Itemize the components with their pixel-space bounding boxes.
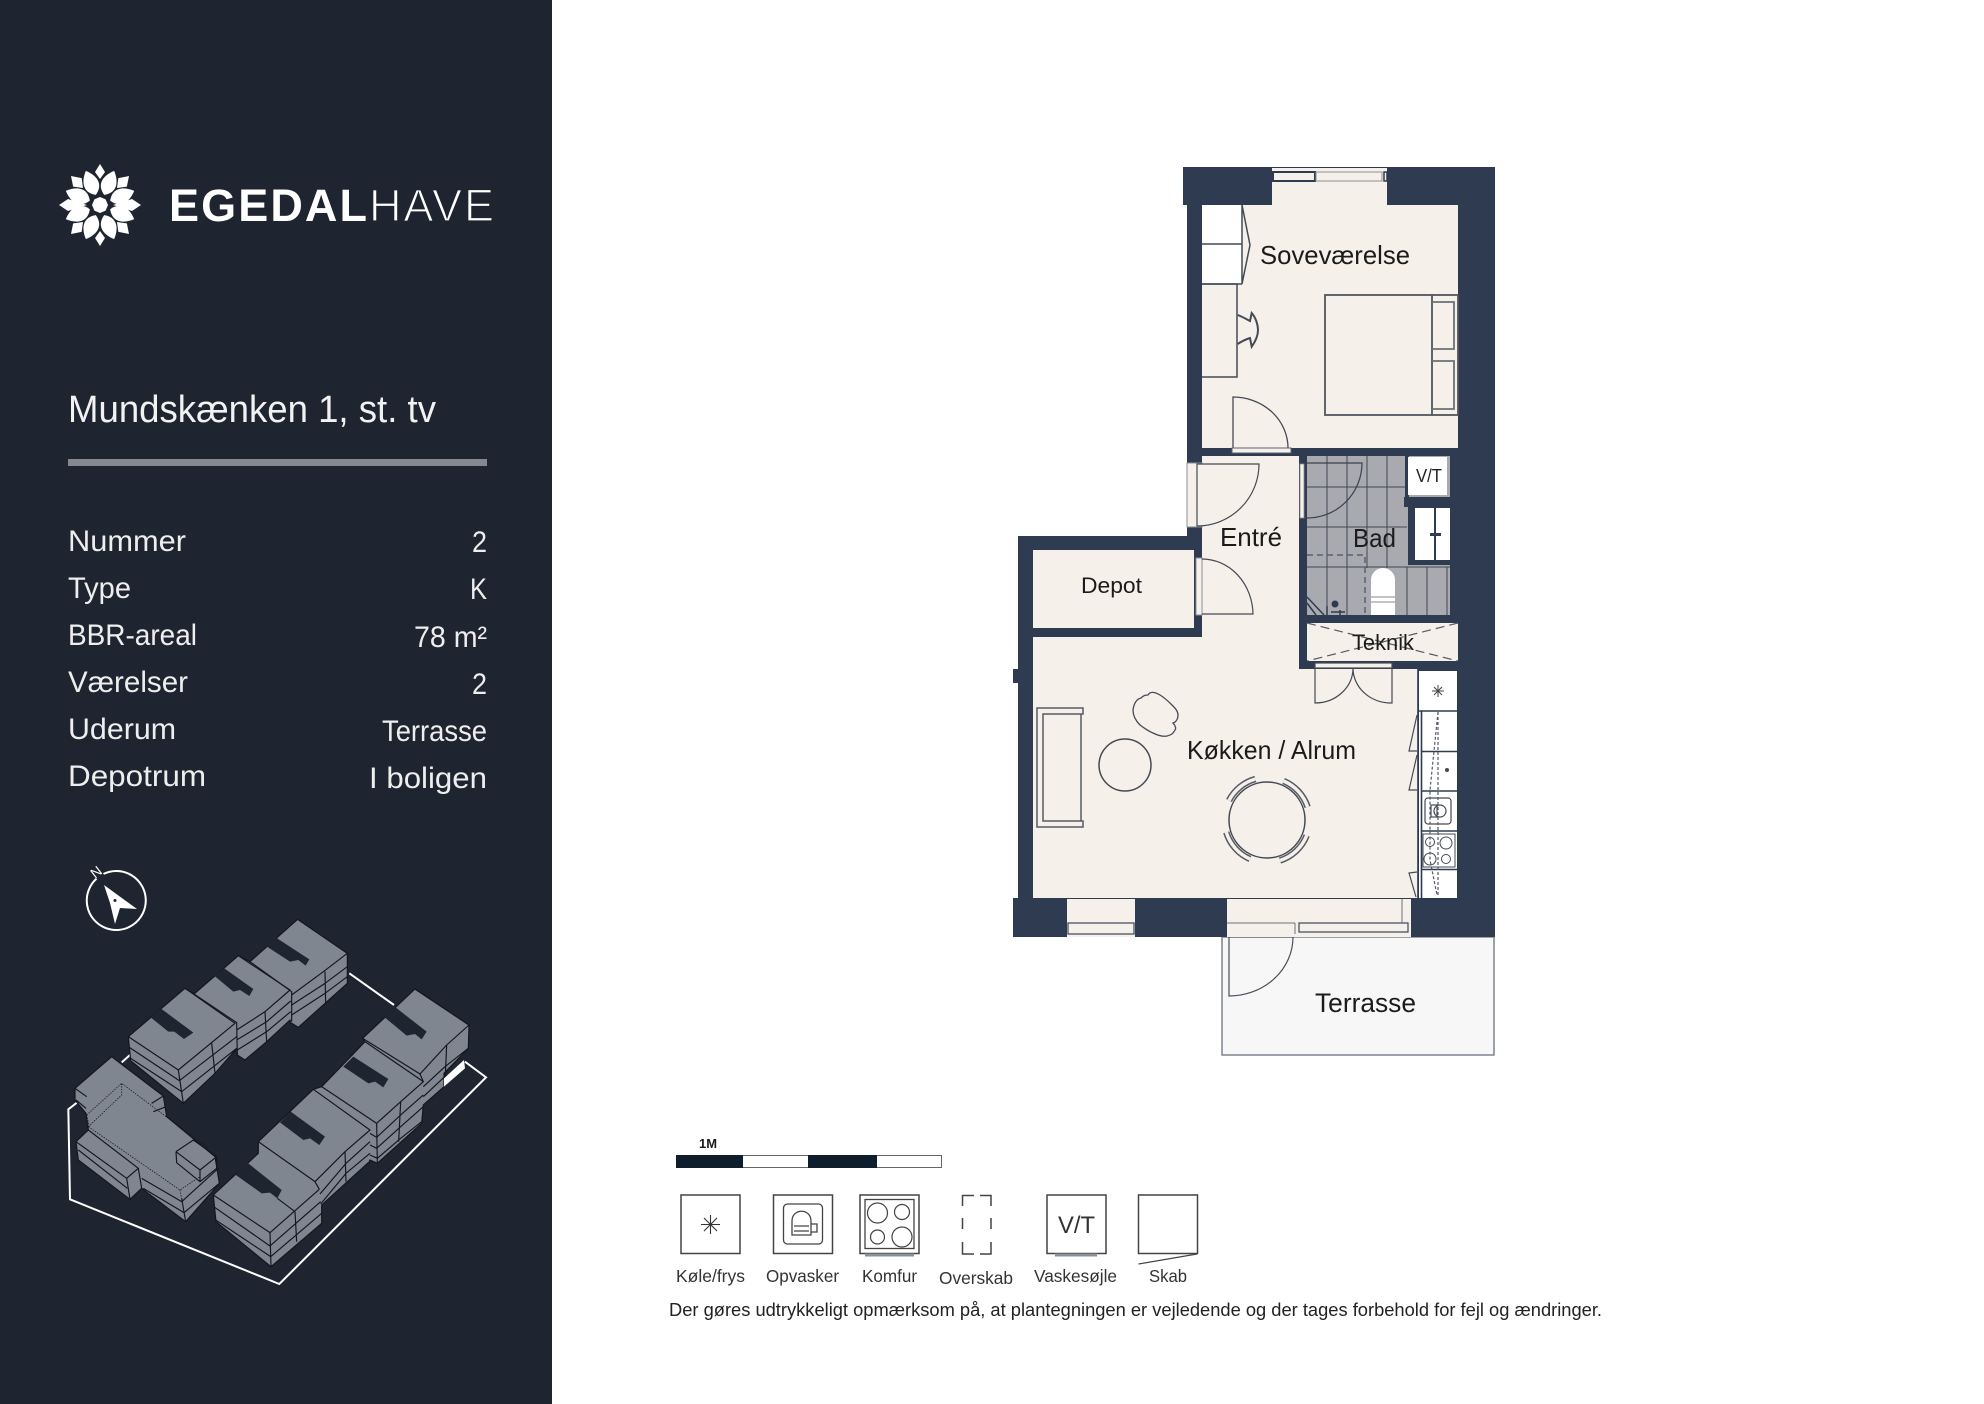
- site map: isometric buildings: [68, 919, 486, 1284]
- label: Soveværelse: Soveværelse: [1260, 240, 1410, 270]
- legend: Vaskesøjle: V/T: [1058, 1212, 1095, 1239]
- row: Nummer: [68, 525, 487, 559]
- wall stub and V/T box: V/T: [1416, 466, 1442, 486]
- scale bar: 1M: [699, 1137, 717, 1151]
- icon: flower logo: [59, 164, 141, 246]
- row: Type: Type: [68, 572, 131, 605]
- legend: [676, 1195, 1198, 1288]
- legend: Køle/frys: Køle/frys: [676, 1266, 745, 1286]
- desk and chair: [1202, 284, 1258, 377]
- shower fittings: [1307, 597, 1345, 615]
- row: BBR-areal: [68, 619, 487, 654]
- building wing: south east: [213, 989, 469, 1267]
- row: BBR-areal: BBR-areal: [68, 619, 197, 652]
- label: Depot: Depot: [1081, 573, 1142, 598]
- cabinet door swings: [1409, 715, 1417, 897]
- window: bedroom: [1272, 168, 1387, 205]
- dining table with chairs: [1226, 779, 1308, 860]
- row: Værelser: 2: [472, 668, 487, 701]
- exterior walls: [1013, 167, 1495, 937]
- site boundary: [68, 973, 486, 1284]
- sofa: [1037, 708, 1083, 827]
- legend: Køle/frys: [676, 1195, 745, 1286]
- terrace: [1222, 933, 1494, 1055]
- door: bathroom: [1305, 463, 1362, 518]
- scale bar: [676, 1137, 942, 1168]
- icon: compass north arrow: N: [87, 863, 105, 881]
- room: kitchen units: [1409, 669, 1457, 898]
- legend: Skab: Skab: [1149, 1266, 1187, 1286]
- legend: Opvasker: Opvasker: [766, 1266, 839, 1286]
- row: BBR-areal: 78 m²: [414, 621, 487, 654]
- room: depot: [1033, 550, 1253, 628]
- sink: [1408, 507, 1450, 565]
- legend: Opvasker: [766, 1195, 839, 1286]
- legend: Komfur: Komfur: [862, 1266, 917, 1286]
- logo wordmark: HAVE: [369, 180, 494, 231]
- double door: [1315, 663, 1392, 703]
- heading rule: [68, 459, 487, 466]
- row: Type: K: [470, 573, 487, 606]
- room: technical closet: Teknik: [1352, 630, 1415, 655]
- legend: Overskab: Overskab: [939, 1268, 1013, 1288]
- label: Køkken / Alrum: Køkken / Alrum: [1187, 735, 1356, 765]
- row: Depotrum: Depotrum: [68, 760, 206, 793]
- legend: Komfur: [860, 1195, 919, 1286]
- row: Type: [68, 572, 487, 606]
- icon: hob: [1423, 834, 1455, 867]
- legend: Overskab: [939, 1196, 1013, 1288]
- row: Uderum: Terrasse: [382, 715, 487, 748]
- bed: [1325, 295, 1458, 415]
- round side table: [1099, 739, 1151, 791]
- icon: freezer star: [1432, 685, 1444, 697]
- logo wordmark: [169, 180, 494, 231]
- tile grid: [1307, 456, 1450, 615]
- label: Entré: Entré: [1220, 522, 1282, 552]
- row: Uderum: [68, 713, 487, 748]
- building: south west: [75, 1057, 219, 1222]
- door: bedroom: [1232, 397, 1291, 453]
- icon: dishwasher: [1425, 798, 1451, 824]
- row: Depotrum: [68, 760, 487, 795]
- room: bedroom: [1202, 168, 1458, 453]
- room: entry and kitchen: [1033, 456, 1418, 898]
- row: Depotrum: I boligen: [369, 762, 487, 795]
- wardrobe: [1202, 205, 1250, 284]
- label: Bad: Bad: [1353, 523, 1396, 553]
- door: entry: [1187, 463, 1259, 527]
- legend: Skab: [1138, 1195, 1198, 1286]
- icon: dot: [1445, 768, 1449, 772]
- legend: Vaskesøjle: [1034, 1195, 1117, 1286]
- row: Værelser: [68, 666, 487, 701]
- wall stub and V/T box: [1404, 456, 1450, 507]
- legend: Vaskesøjle: Vaskesøjle: [1034, 1266, 1117, 1286]
- toilet: [1371, 568, 1395, 615]
- row: Uderum: Uderum: [68, 713, 176, 746]
- icon: compass north arrow: [87, 863, 146, 930]
- panel: sidebar: [0, 0, 552, 1404]
- room: technical closet: [1307, 623, 1458, 661]
- floor plan: [1013, 167, 1495, 1055]
- windows: south wall: [1067, 899, 1411, 937]
- door: depot: [1196, 558, 1253, 615]
- armchair: [1133, 692, 1178, 736]
- row: Værelser: Værelser: [68, 666, 188, 699]
- row: Nummer: 2: [472, 526, 487, 559]
- row: Nummer: Nummer: [68, 525, 186, 558]
- logo wordmark: EGEDAL: [169, 180, 367, 231]
- terrace: Terrasse: [1315, 988, 1416, 1018]
- overhead cabinet dashes: [1430, 712, 1438, 895]
- info table: [68, 525, 487, 795]
- building wing: north: [128, 919, 347, 1103]
- room: bathroom: [1300, 456, 1450, 615]
- disclaimer: Der gøres udtrykkeligt opmærksom på, at plantegningen er vejledende og der tages forbehold for fejl og ændringer.: [669, 1300, 1602, 1320]
- address heading: Mundskænken 1, st. tv: [68, 389, 436, 431]
- wet-zone dashes: [1307, 555, 1365, 615]
